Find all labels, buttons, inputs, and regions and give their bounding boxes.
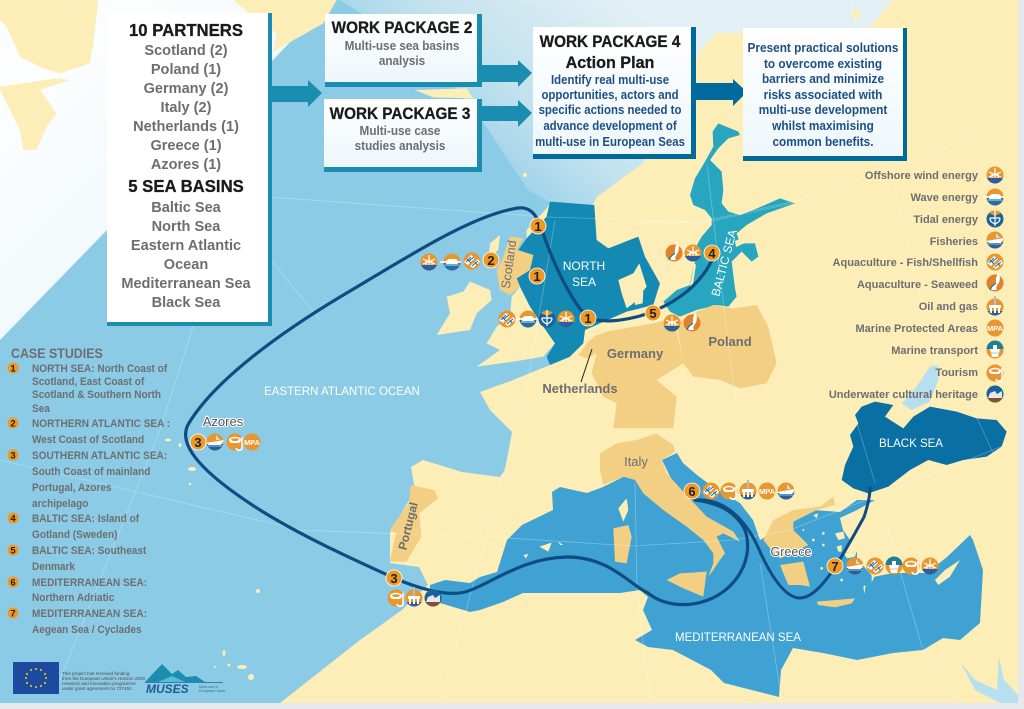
case study text: BALTIC SEA: Island of <box>32 513 140 525</box>
label: Mediterranean Sea: MEDITERRANEAN SEA <box>675 632 801 644</box>
label: Italy: Italy <box>624 454 648 469</box>
panel: practical solutions: risks associated with <box>764 88 882 102</box>
site 6 Northern Adriatic with icons <box>684 480 795 500</box>
heading: 5 sea basins: 5 SEA BASINS <box>128 175 244 196</box>
site 3 South Portugal with icons: 3 <box>390 571 398 586</box>
label: Germany: Germany <box>607 346 664 361</box>
legend: multi-use activities: Offshore wind energy <box>865 170 979 182</box>
case study number badges: 1 <box>10 364 16 374</box>
legend: multi-use activities: Underwater cultural heritage <box>829 389 978 401</box>
partner list: Netherlands (1) <box>133 119 239 135</box>
Mediterranean islands <box>523 498 707 597</box>
panel: practical solutions: Present practical solutions <box>748 41 899 55</box>
sea: North Sea <box>517 202 660 365</box>
legend: multi-use activities: Tidal energy <box>913 214 979 226</box>
case study text: MEDITERRANEAN SEA: <box>32 577 147 589</box>
label: Poland: Poland <box>708 334 752 349</box>
site 1 north coast: 1 <box>534 219 542 234</box>
panel: partners and sea basins <box>107 13 272 326</box>
country: Netherlands <box>578 335 597 358</box>
panel: practical solutions: whilst maximising <box>771 119 874 133</box>
case study number badges: 5 <box>10 546 16 556</box>
partner list: Greece (1) <box>150 138 222 154</box>
panel: work package 2: Multi-use sea basins <box>345 39 460 53</box>
case study text: Scotland, East Coast of <box>32 376 145 388</box>
panel: work package 4: specific actions needed to <box>539 103 681 117</box>
legend: multi-use activities: Oil and gas <box>919 301 978 313</box>
site 1 southern north sea with icons: 1 <box>584 311 592 326</box>
label: North Sea: NORTH <box>563 259 605 273</box>
sea basin list: Eastern Atlantic <box>131 238 241 254</box>
map labels <box>203 228 943 644</box>
EU flag <box>13 662 59 694</box>
label: Greece: Greece <box>770 545 812 559</box>
case study number badges: 3 <box>10 450 16 462</box>
case study text: Northern Adriatic <box>32 592 114 604</box>
case study text: BALTIC SEA: Southeast <box>32 545 147 557</box>
MUSES logo: MUSES <box>146 682 189 696</box>
case study text: West Coast of Scotland <box>32 434 144 446</box>
islands and Atlantic land <box>437 203 555 367</box>
legend: multi-use activities: Marine transport <box>891 345 978 357</box>
panel: practical solutions: common benefits. <box>772 135 874 149</box>
arrow: WP3 to WP4 <box>482 100 532 127</box>
panel: work package 2 <box>325 14 482 87</box>
case study number badges: 2 <box>10 418 16 430</box>
site 5 southeast Denmark with icons <box>645 305 700 332</box>
country: Scotland <box>497 237 533 295</box>
panel: work package 4: advance development of <box>543 119 678 133</box>
panel: work package 3: studies analysis <box>355 139 446 153</box>
legend: multi-use activities: Tourism <box>935 367 978 379</box>
legend: multi-use activities: Aquaculture - Fish/Shellfish <box>833 257 978 269</box>
case study text: Sea <box>32 403 50 415</box>
label: Black Sea: BLACK SEA <box>879 438 943 450</box>
site 1 east coast <box>529 268 545 284</box>
site 7 Aegean with icons <box>827 556 939 575</box>
heading: 10 partners: 10 PARTNERS <box>129 19 243 40</box>
panel: work package 3: Multi-use case <box>360 124 441 138</box>
legend: multi-use activities: Wave energy <box>911 192 979 204</box>
sea basin list: North Sea <box>152 219 221 235</box>
case study number badges: 7 <box>10 608 16 620</box>
MUSES logo: European Seas <box>199 689 225 693</box>
site 4 Gotland with icons: 4 <box>708 246 716 261</box>
site 4 Gotland with icons <box>666 242 720 262</box>
MUSES logo <box>145 664 225 696</box>
legend: multi-use activities: Marine Protected Areas <box>856 323 978 335</box>
label: Portugal: Portugal <box>395 501 421 551</box>
site 1 north coast <box>530 218 546 234</box>
panel: practical solutions: barriers and minimize <box>762 72 884 86</box>
site 6 Northern Adriatic with icons: 6 <box>688 484 696 499</box>
case study markers on map <box>190 218 939 607</box>
legend: multi-use activities: Fisheries <box>930 236 978 248</box>
funding statement: from the European Union's Horizon 2020 <box>62 676 146 681</box>
MUSES logo: Multi-use in <box>199 685 218 689</box>
leader line: Netherlands <box>581 349 592 382</box>
panel: practical solutions: multi-use development <box>759 103 887 117</box>
arrow: partners to work packages <box>272 80 322 107</box>
site 5 southeast Denmark with icons: 5 <box>649 306 657 321</box>
site 3 Azores with icons: MPA <box>244 438 261 447</box>
sea basin list: Ocean <box>164 257 208 273</box>
case study text: MEDITERRANEAN SEA: <box>32 608 147 620</box>
arrow: WP2 to WP4 <box>482 60 532 87</box>
case study text: Denmark <box>32 561 75 573</box>
site 3 Azores with icons <box>190 434 261 451</box>
panel: work package 3 <box>324 99 482 172</box>
partner countries highlighted <box>497 237 777 428</box>
partner list: Poland (1) <box>151 62 221 78</box>
project route line <box>186 208 870 605</box>
case study text: South Coast of mainland <box>32 466 150 478</box>
panel: work package 2: WORK PACKAGE 2 <box>332 18 472 37</box>
panel: work package 4: WORK PACKAGE 4 <box>540 32 680 51</box>
site 3 Azores with icons: 3 <box>194 435 202 450</box>
label: Azores: Azores <box>203 414 244 429</box>
label: Baltic Sea: BALTIC SEA <box>709 228 740 298</box>
legend: multi-use activities: Aquaculture - Seaweed <box>857 279 978 291</box>
panel: practical solutions <box>743 28 907 161</box>
partner list: Scotland (2) <box>144 43 228 59</box>
legend: multi-use activities <box>829 166 1004 403</box>
site 7 Aegean with icons: 7 <box>831 559 839 574</box>
panel: case studies list <box>8 346 170 636</box>
case study text: NORTHERN ATLANTIC SEA : <box>32 418 170 430</box>
heading: case studies: CASE STUDIES <box>11 346 103 361</box>
sea basin list: Baltic Sea <box>151 200 222 216</box>
land: Greece <box>763 497 960 607</box>
sea basin list: Black Sea <box>152 295 221 311</box>
label: Eastern Atlantic Ocean: EASTERN ATLANTIC OCEAN <box>264 386 420 398</box>
panel: work package 4: multi-use in European Seas <box>535 135 685 149</box>
case study text: SOUTHERN ATLANTIC SEA: <box>32 450 167 462</box>
label: Scotland: Scotland <box>499 239 519 290</box>
partner list: Italy (2) <box>161 100 212 116</box>
label: Netherlands: Netherlands <box>542 381 618 396</box>
pale Red Sea inlet <box>961 657 1018 703</box>
site 3 South Portugal with icons <box>386 570 442 607</box>
land: Italy <box>600 433 740 577</box>
case study number badges: 6 <box>10 578 16 588</box>
case study text: Gotland (Sweden) <box>32 529 117 541</box>
legend: multi-use activities: MPA <box>987 324 1004 333</box>
country: Portugal <box>390 485 438 562</box>
land: continental Europe and Africa <box>280 0 1018 703</box>
country: Poland <box>677 305 777 388</box>
arrow: WP4 to solutions <box>696 79 747 106</box>
funding statement: under grant agreement no 727451 <box>62 686 132 691</box>
funding statement: This project has received funding <box>62 671 130 676</box>
panel: work package 3: WORK PACKAGE 3 <box>330 104 470 123</box>
panel: work package 4: Action Plan <box>566 53 654 72</box>
label: North Sea: SEA <box>572 275 596 289</box>
partner list: Germany (2) <box>144 81 228 97</box>
site 1 east coast: 1 <box>533 269 541 284</box>
sea: Black Sea <box>842 365 1007 493</box>
sea: Mediterranean Sea <box>430 453 983 697</box>
partner list: Azores (1) <box>151 157 221 173</box>
panel: practical solutions: to overcome existing <box>764 57 882 71</box>
site 2 west coast of Scotland with icons <box>420 252 499 271</box>
case study text: NORTH SEA: North Coast of <box>32 363 168 375</box>
case study number badges <box>8 362 18 620</box>
site 2 west coast of Scotland with icons: 2 <box>487 253 495 268</box>
case study text: Scotland & Southern North <box>32 389 161 401</box>
panel: work package 4: opportunities, actors and <box>541 88 679 102</box>
case study number badges: 4 <box>10 514 16 524</box>
country: Germany <box>592 320 683 428</box>
case study text: archipelago <box>32 498 89 510</box>
sea: Baltic Sea <box>663 123 795 317</box>
panel: work package 4 <box>533 27 696 159</box>
case study text: Portugal, Azores <box>32 482 112 494</box>
site 6 Northern Adriatic with icons: MPA <box>759 487 776 496</box>
sea basin list: Mediterranean Sea <box>121 276 251 292</box>
panel: work package 4: Identify real multi-use <box>551 73 669 87</box>
funding statement: research and innovation programme <box>62 681 136 686</box>
site 1 southern north sea with icons <box>498 310 596 328</box>
case study text: Aegean Sea / Cyclades <box>32 624 142 636</box>
panel: work package 2: analysis <box>379 54 425 68</box>
